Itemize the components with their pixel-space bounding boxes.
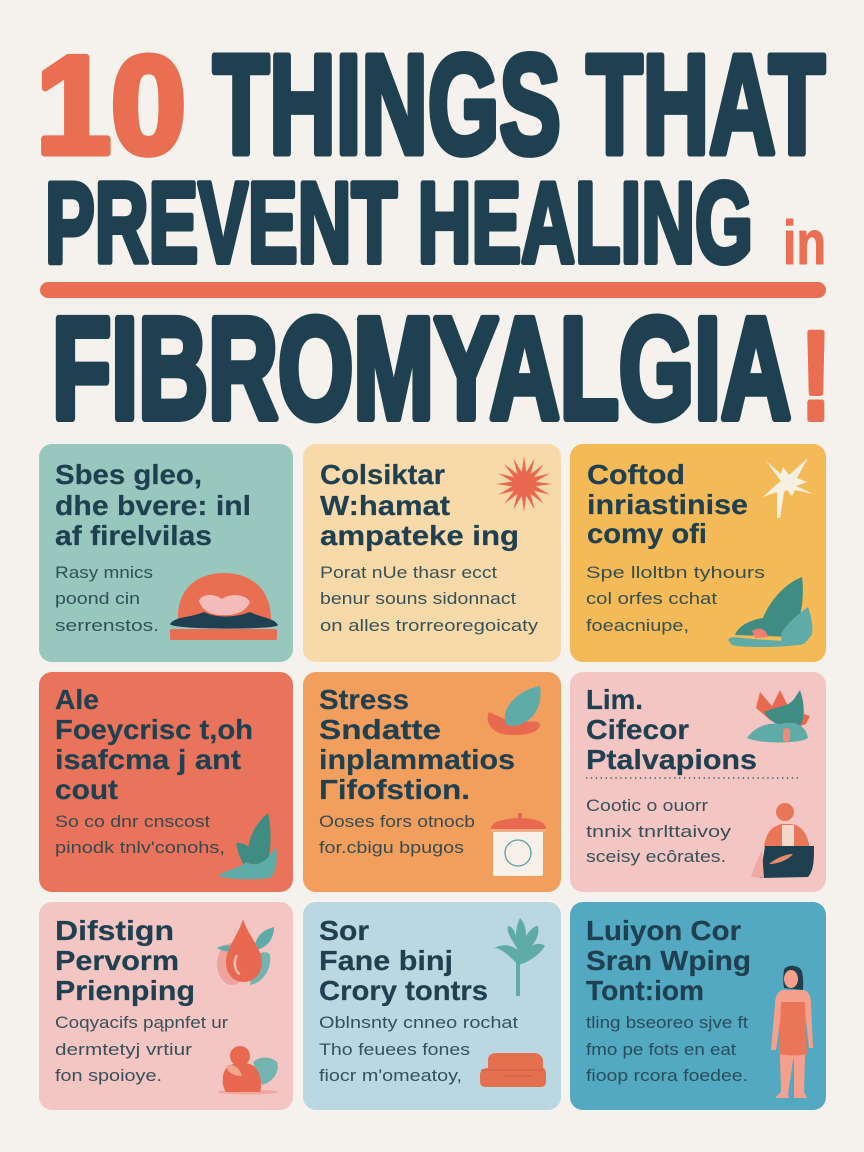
card 6 dotted divider (586, 777, 800, 779)
card 9 heading: Sran Wping (586, 945, 751, 976)
card 8 heading: Fane binj (319, 945, 453, 976)
card 3 body (586, 563, 765, 635)
card 3 heading: inriastinise (587, 489, 748, 520)
card 3 body: col orfes cchat (586, 589, 717, 608)
title: in (783, 209, 826, 278)
card 1 heading (55, 459, 251, 551)
card 7 heading: Prienping (55, 975, 195, 1006)
title: 10 (36, 28, 186, 183)
card 6 body: sceisy ecôrates. (586, 847, 726, 866)
card 4 body (55, 812, 225, 857)
card 5 heading (319, 684, 515, 805)
panel: card 5 (303, 672, 561, 892)
panel: card 4 (39, 672, 293, 892)
card 1 body: Rasy mnics (55, 563, 153, 582)
card 4 heading: isafcma j ant (55, 744, 241, 775)
icon: pain starburst (496, 456, 552, 512)
card 7 body: Coqyacifs pąpnfet ur (55, 1013, 228, 1032)
panel: card 2 (303, 444, 561, 662)
icon: leaf on coral dish (488, 686, 540, 735)
card 3 body: foeacniupe, (586, 616, 689, 635)
card 7 heading: Difstign (55, 915, 174, 946)
title: ! (801, 307, 831, 446)
card 4 heading: Ale (55, 684, 99, 715)
card 1 heading: af firelvilas (55, 520, 212, 551)
icon: person resting (218, 1046, 278, 1094)
card 4 heading: cout (55, 774, 118, 805)
card 4 body: pinodk tnlv'conohs, (55, 838, 225, 857)
card 3 heading: Coftod (587, 459, 685, 490)
card 5 heading: Stress (319, 684, 409, 715)
card 6 heading (586, 684, 757, 775)
card 8 heading: Crory tontrs (319, 975, 488, 1006)
card 4 heading (55, 684, 253, 805)
card 5 heading: Γifofstion. (319, 774, 470, 805)
card 9 heading: Luiyon Cor (586, 915, 741, 946)
icon: jar (491, 813, 546, 876)
card 1 body: poond cin (55, 589, 140, 608)
card 9 body: tling bseoreo sjve ft (586, 1013, 748, 1032)
card 6 body: Cootic o ouorr (586, 796, 708, 815)
card 6 body: tnnix tnrlttaivoy (586, 822, 732, 841)
card 6 heading: Lim. (586, 684, 643, 715)
card 5 heading: inplammatios (319, 744, 515, 775)
card 6 heading: Cifecor (586, 714, 689, 745)
icon: teal and coral plant (747, 690, 810, 742)
card 1 body: serrenstos. (55, 616, 159, 635)
title (36, 25, 831, 449)
card 9 heading (586, 915, 751, 1006)
icon: teal plant (218, 813, 277, 879)
card 7 heading (55, 915, 195, 1006)
card 2 body: on alles trorreoregoicaty (320, 616, 539, 635)
card 2 body: Porat nUe thasr ecct (320, 563, 497, 582)
card 9 body (586, 1013, 748, 1085)
card 8 body (319, 1013, 518, 1085)
card 7 body: dermtetyj vrtiur (55, 1040, 192, 1059)
panel: card 6 (570, 672, 826, 892)
panel: card 3 (570, 444, 826, 662)
card 9 body: fmo pe fots en eat (586, 1040, 736, 1059)
card 2 heading: ampateke ing (320, 520, 519, 551)
card 7 heading: Pervorm (55, 945, 179, 976)
icon: coral sofa (480, 1053, 546, 1087)
card 1 heading: dhe bvere: inl (55, 490, 251, 521)
card 8 heading: Sor (319, 915, 369, 946)
card 2 body (320, 563, 539, 635)
card 7 body (55, 1013, 228, 1085)
card 5 body (319, 812, 475, 857)
card 8 body: fiocr m'omeatoy, (319, 1066, 462, 1085)
card 5 body: for.cbigu bpugos (319, 838, 464, 857)
card 6 body (586, 796, 732, 866)
card 5 heading: Sndatte (319, 714, 441, 745)
card 4 heading: Foeycrisc t,oh (55, 714, 253, 745)
card 1 heading: Sbes gleo, (55, 459, 202, 490)
title divider bar (40, 282, 826, 298)
card 8 body: Tho feuees fones (319, 1040, 470, 1059)
card 5 body: Ooses fors otnocb (319, 812, 475, 831)
card 3 heading (587, 459, 748, 549)
panel: card 8 (303, 902, 561, 1110)
card 2 heading: W:hamat (320, 490, 450, 521)
card 2 body: benur souns sidonnact (320, 589, 516, 608)
icon: person at laptop (751, 803, 814, 878)
card 7 body: fon spoioye. (55, 1066, 162, 1085)
icon: drop with leaves (217, 919, 274, 985)
card 2 heading (320, 459, 519, 551)
icon: standing woman (771, 966, 813, 1098)
card 8 body: Oblnsnty cnneo rochat (319, 1013, 518, 1032)
card 3 body: Spe lloltbn tyhours (586, 563, 765, 582)
card 6 heading: Ptalvapions (586, 744, 757, 775)
icon: person sleeping in bed (170, 573, 278, 640)
card 9 body: fioop rcora foedee. (586, 1066, 748, 1085)
icon: teal plant (494, 918, 545, 996)
card 3 heading: comy ofi (587, 518, 707, 549)
card 4 body: So co dnr cnscost (55, 812, 210, 831)
icon: teal leaves (728, 577, 812, 647)
card 2 heading: Colsiktar (320, 459, 445, 490)
panel: card 7 (39, 902, 293, 1110)
card 8 heading (319, 915, 488, 1006)
card 1 body (55, 563, 159, 635)
panel: card 1 (39, 444, 293, 662)
card 9 heading: Tont:iom (586, 975, 704, 1006)
icon: white sparkle (763, 458, 813, 518)
panel: card 9 (570, 902, 826, 1110)
